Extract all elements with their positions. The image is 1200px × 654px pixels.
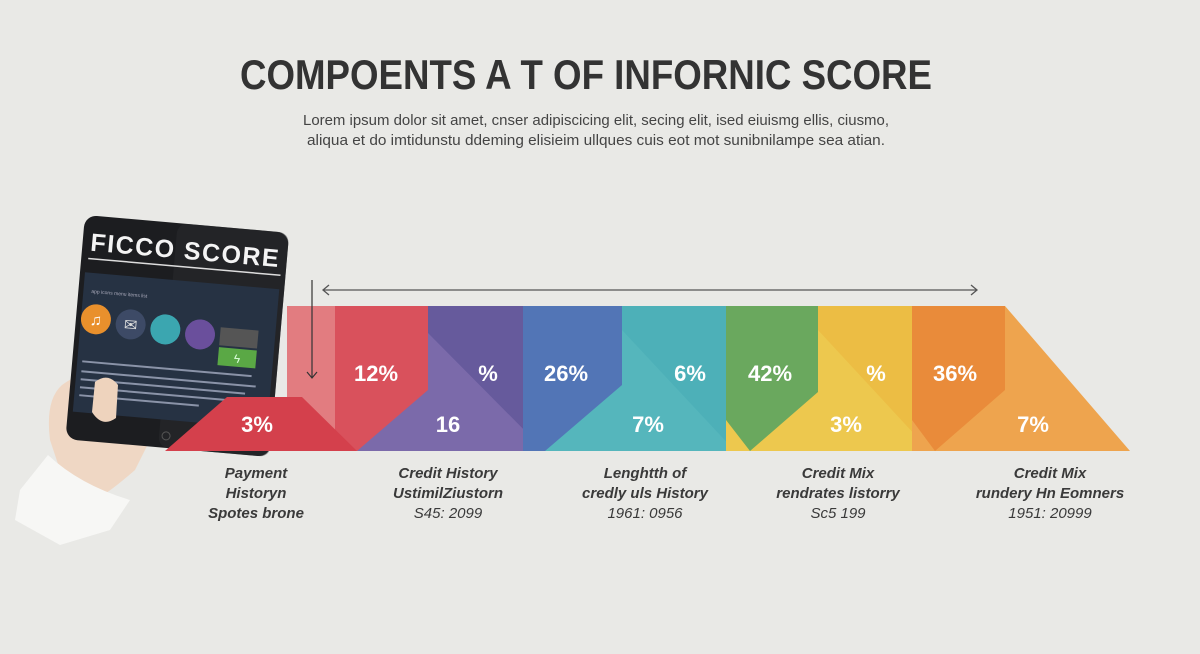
labels: Credit Mix: [802, 465, 875, 482]
labels: rundery Hn Eomners: [976, 485, 1124, 502]
labels: credly uls History: [582, 485, 709, 502]
percentages: 16: [436, 412, 460, 437]
horizontal arrow: [323, 285, 977, 295]
tablet screen: ϟ: [233, 352, 241, 366]
labels: 1951: 20999: [1008, 505, 1092, 522]
tablet screen: ✉: [123, 317, 138, 335]
tablet screen: ♫: [89, 312, 103, 330]
subtitle: aliqua et do imtidunstu ddeming elisieim ullques cuis eot mot sunibnilampe sea atian.: [307, 133, 885, 149]
subtitle: Lorem ipsum dolor sit amet, cnser adipiscicing elit, secing elit, ised eiuismg ellis, ciusmo,: [303, 113, 889, 129]
title: COMPOENTS A T OF INFORNIC SCORE: [240, 51, 932, 98]
tablet screen: [73, 272, 279, 429]
percentages: 26%: [544, 361, 588, 386]
labels: rendrates listorry: [776, 485, 900, 502]
labels: UstimilZiustorn: [393, 485, 503, 502]
labels: Spotes brone: [208, 505, 304, 522]
percentages: 6%: [674, 361, 706, 386]
percentages: %: [478, 361, 498, 386]
thumb: [92, 378, 118, 422]
labels: Credit History: [398, 465, 498, 482]
percentages: [241, 361, 1049, 437]
percentages: 42%: [748, 361, 792, 386]
percentages: 3%: [241, 412, 273, 437]
band chart: [165, 306, 1130, 451]
percentages: 36%: [933, 361, 977, 386]
labels: Sc5 199: [810, 505, 866, 522]
labels: Credit Mix: [1014, 465, 1087, 482]
labels: Historyn: [226, 485, 286, 502]
vertical arrow: [307, 280, 317, 378]
subtitle: [303, 113, 889, 149]
hand holding tablet: [15, 372, 150, 545]
labels: 1961: 0956: [607, 505, 683, 522]
percentages: 7%: [1017, 412, 1049, 437]
tablet title: FICCO SCORE: [89, 229, 281, 273]
labels: [208, 465, 1124, 522]
percentages: %: [866, 361, 886, 386]
percentages: 3%: [830, 412, 862, 437]
percentages: 12%: [354, 361, 398, 386]
labels: S45: 2099: [414, 505, 483, 522]
percentages: 7%: [632, 412, 664, 437]
labels: Lenghtth of: [604, 465, 688, 482]
labels: Payment: [225, 465, 288, 482]
tablet screen: app icons menu items list: [91, 289, 148, 300]
tablet: [65, 215, 289, 457]
